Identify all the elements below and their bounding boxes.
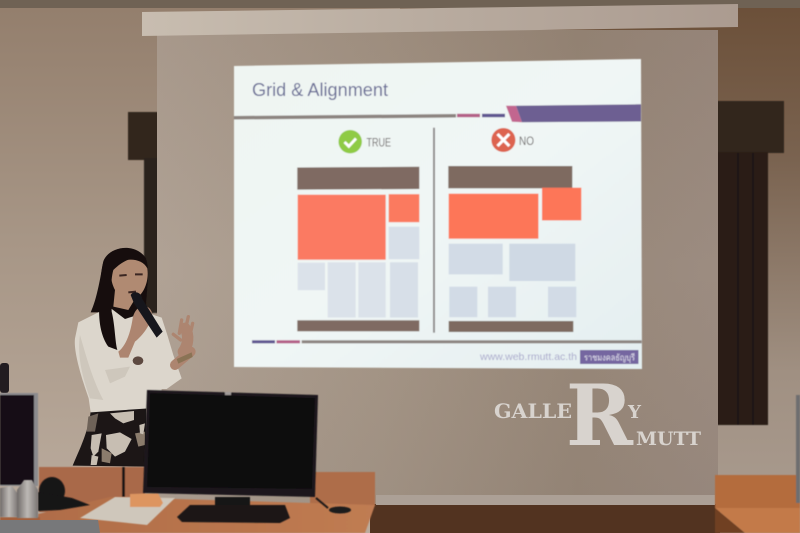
- column divider: [433, 128, 435, 333]
- icon: red cross: [491, 128, 515, 152]
- hair front: [99, 248, 146, 350]
- microphone: [131, 292, 163, 338]
- icon: green check: [338, 130, 362, 153]
- acoustic panel left: [128, 112, 158, 313]
- watermark: GALLERY RMUTT: Y: [627, 402, 642, 423]
- footer url: www.web.rmutt.ac.th: [479, 351, 577, 363]
- footer logo: [580, 350, 638, 364]
- neck and face: [111, 260, 148, 310]
- header rule: [234, 104, 641, 122]
- watermark: GALLERY RMUTT: [494, 366, 701, 465]
- raised hand: [173, 317, 193, 365]
- watermark: GALLERY RMUTT: GALLE: [494, 399, 572, 423]
- presenter: [73, 248, 193, 467]
- hair back: [91, 248, 156, 355]
- projected slide: [234, 59, 642, 369]
- layout example: aligned grid: [297, 167, 419, 331]
- label: TRUE: TRUE: [366, 138, 391, 150]
- footer rule: [252, 340, 642, 343]
- slide background: [234, 59, 642, 369]
- water bottles: [0, 480, 38, 518]
- skirt: [73, 408, 146, 467]
- watermark: GALLERY RMUTT: R: [566, 366, 634, 465]
- notepad and sticky notes: [80, 493, 175, 525]
- blouse brooch: [133, 356, 143, 365]
- monitor left: [0, 393, 38, 486]
- watermark: GALLERY RMUTT: MUTT: [636, 428, 701, 450]
- blouse sleeve shadow: [79, 335, 130, 400]
- monitor center: [143, 390, 351, 523]
- slide title: Grid & Alignment: [252, 79, 388, 100]
- skirt flowers: [87, 411, 145, 465]
- side desk right: [715, 395, 800, 533]
- camera on desk: [38, 477, 90, 511]
- blouse: [75, 308, 182, 412]
- desk back panels and top: [0, 467, 375, 533]
- acoustic panel right: [717, 101, 784, 425]
- footer logo: ราชมงคลธัญบุรี: [584, 352, 635, 364]
- label: NO: NO: [519, 136, 534, 148]
- laptop edge: [0, 520, 100, 533]
- wood floor strip below screen: [370, 503, 720, 533]
- screen housing: [142, 4, 738, 36]
- eyes and lips: [119, 274, 143, 292]
- dark chair back at far left: [0, 363, 9, 393]
- projector screen: [157, 30, 718, 505]
- wrist watch: [177, 352, 193, 364]
- hand on microphone and forearm: [118, 306, 152, 358]
- layout example: misaligned grid: [448, 166, 581, 332]
